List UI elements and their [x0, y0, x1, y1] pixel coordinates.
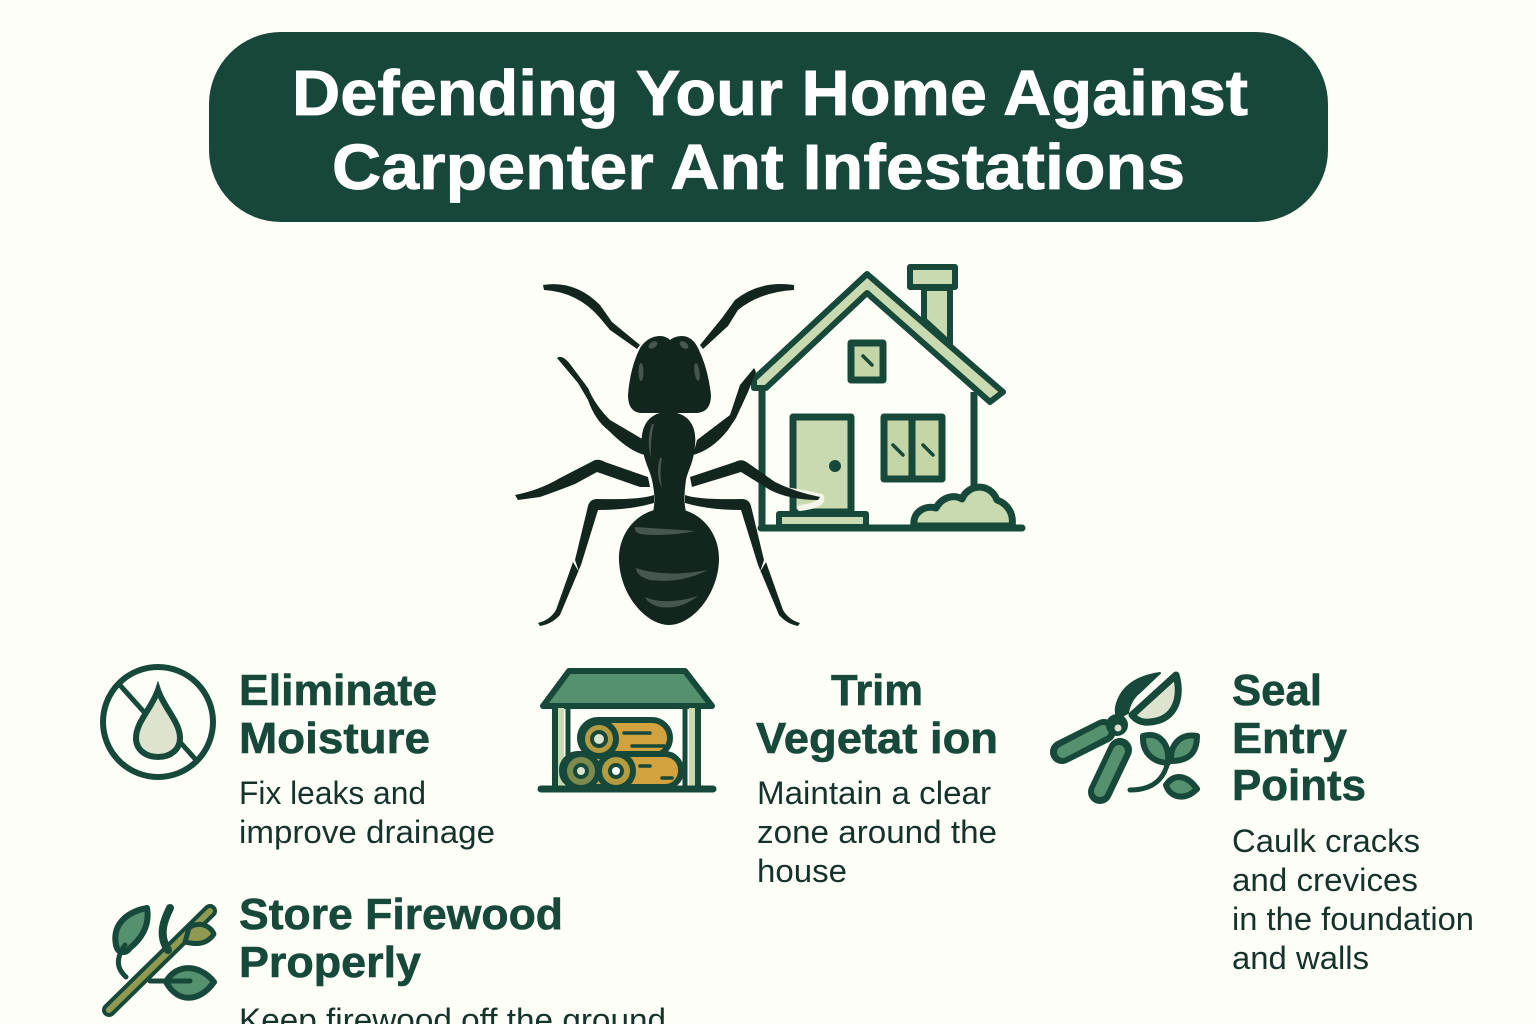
- description: Maintain a clear: [757, 775, 991, 811]
- door step: [779, 514, 866, 527]
- panel: Trim Vegetation: [541, 666, 998, 889]
- heading: Points: [1232, 761, 1366, 810]
- heading: Seal: [1232, 666, 1322, 715]
- title banner: [209, 32, 1328, 222]
- panel: Store Firewood Properly: [109, 890, 666, 1024]
- ant abdomen: [619, 508, 719, 625]
- panel: Eliminate Moisture: [103, 666, 495, 850]
- roof: [754, 274, 1003, 402]
- attic window: [851, 343, 883, 380]
- heading: Moisture: [239, 714, 430, 763]
- description: Caulk cracks: [1232, 823, 1420, 859]
- description: in the foundation: [1232, 901, 1474, 937]
- title banner: Defending Your Home Against: [292, 57, 1248, 129]
- illustration: carpenter ant: [515, 284, 821, 626]
- icon: pruning shears: [1062, 673, 1197, 797]
- bush: [914, 487, 1012, 526]
- panel: Seal Entry Points: [1062, 666, 1474, 976]
- antennae and legs: [515, 284, 820, 626]
- description: Fix leaks and: [239, 775, 426, 811]
- heading: Trim: [831, 666, 923, 715]
- description: zone around the: [757, 814, 997, 850]
- title banner: Carpenter Ant Infestations: [332, 131, 1185, 203]
- description: and crevices: [1232, 862, 1418, 898]
- description: improve drainage: [239, 814, 495, 850]
- window: [884, 417, 942, 479]
- ground line: [761, 524, 1022, 532]
- door: [793, 417, 851, 512]
- ant highlights: [635, 340, 708, 608]
- icon: no water drop: [103, 667, 213, 777]
- leg halo on door: [785, 490, 821, 508]
- heading: Entry: [1232, 714, 1348, 763]
- description: and walls: [1232, 940, 1369, 976]
- heading: Vegetat ion: [756, 714, 998, 763]
- description: house: [757, 853, 847, 889]
- icon: leafy branch: [109, 908, 214, 1010]
- icon: firewood shed: [541, 671, 713, 789]
- ant head: [628, 336, 711, 413]
- heading: Store Firewood: [239, 890, 563, 939]
- heading: Properly: [239, 938, 422, 987]
- heading: Eliminate: [239, 666, 437, 715]
- illustration: house: [754, 267, 1022, 528]
- ant thorax: [642, 412, 695, 512]
- chimney: [910, 267, 955, 344]
